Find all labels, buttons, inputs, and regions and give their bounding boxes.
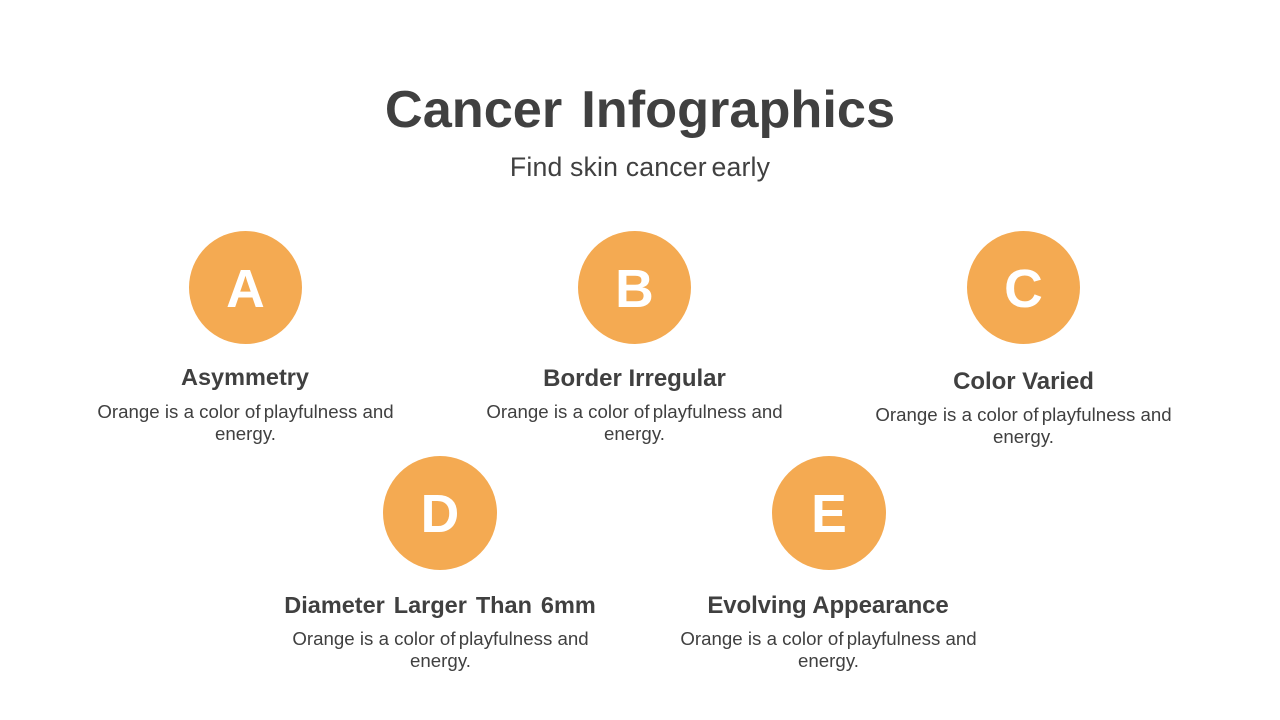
icon: letter E circle bbox=[772, 456, 886, 570]
icon: letter D circle: D bbox=[421, 485, 459, 544]
text: color description bbox=[875, 404, 1172, 447]
panel: E evolving bbox=[680, 456, 977, 671]
text: asymmetry description: energy. bbox=[215, 423, 276, 444]
icon: letter C circle: C bbox=[1004, 260, 1043, 319]
title: Cancer Infographics bbox=[385, 81, 895, 139]
text: diameter description bbox=[292, 628, 589, 671]
panel: C color varied bbox=[875, 231, 1172, 447]
icon: letter B circle bbox=[578, 231, 691, 344]
text: evolving description: Orange is a color of playfulness and bbox=[680, 628, 977, 649]
text: color description: Orange is a color of playfulness and bbox=[875, 404, 1172, 425]
heading: diameter: Diameter Larger Than 6mm bbox=[284, 592, 596, 618]
icon: letter C circle bbox=[967, 231, 1080, 344]
heading: asymmetry: Asymmetry bbox=[181, 364, 309, 390]
text: asymmetry description bbox=[97, 401, 394, 444]
text: border description bbox=[486, 401, 783, 444]
text: border description: Orange is a color of playfulness and bbox=[486, 401, 783, 422]
icon: letter A circle bbox=[189, 231, 302, 344]
text: evolving description: energy. bbox=[798, 650, 859, 671]
icon: letter A circle: A bbox=[226, 260, 265, 319]
heading: color varied: Color Varied bbox=[953, 368, 1094, 395]
text: border description: energy. bbox=[604, 423, 665, 444]
icon: letter E circle: E bbox=[811, 485, 847, 544]
text: color description: energy. bbox=[993, 426, 1054, 447]
text: asymmetry description: Orange is a color of playfulness and bbox=[97, 401, 394, 422]
heading: evolving appearance: Evolving Appearance bbox=[707, 592, 949, 619]
panel: A asymmetry bbox=[97, 231, 394, 444]
icon: letter B circle: B bbox=[615, 260, 654, 319]
panel: B border irregular bbox=[486, 231, 783, 444]
subtitle: Find skin cancer early bbox=[510, 152, 770, 182]
text: diameter description: Orange is a color of playfulness and bbox=[292, 628, 589, 649]
text: evolving description bbox=[680, 628, 977, 671]
heading: border irregular: Border Irregular bbox=[543, 365, 726, 392]
panel: D diameter bbox=[284, 456, 596, 671]
icon: letter D circle bbox=[383, 456, 497, 570]
text: diameter description: energy. bbox=[410, 650, 471, 671]
